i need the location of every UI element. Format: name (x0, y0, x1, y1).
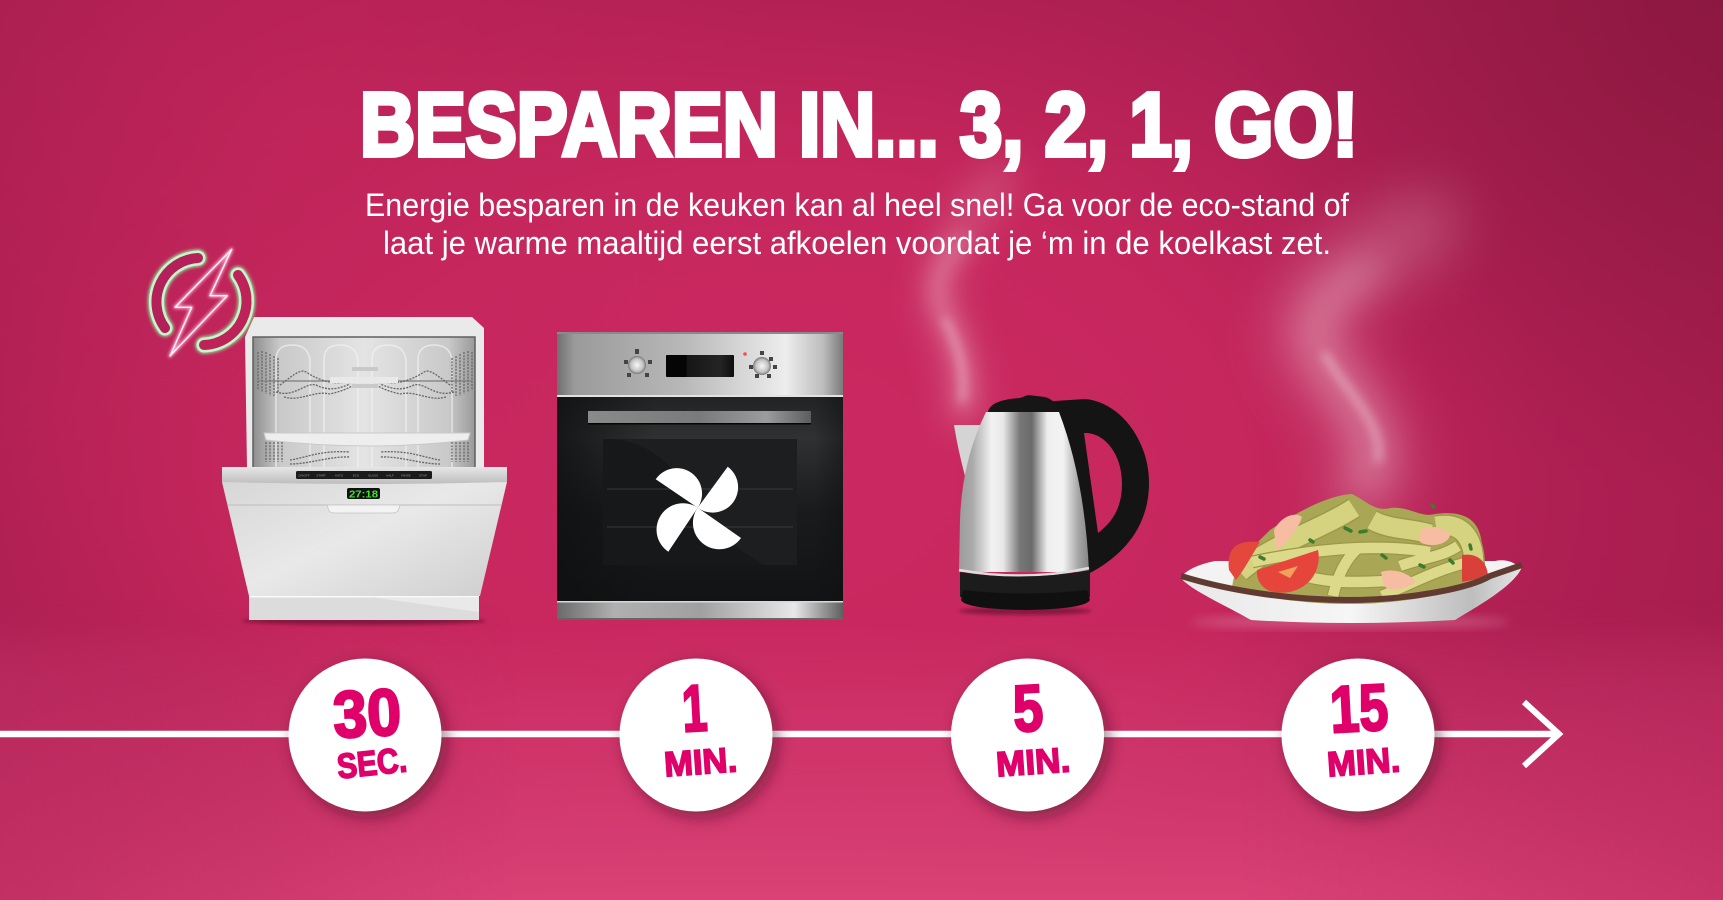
timeline arrow (0, 702, 1560, 766)
step: 1 min: 1 (680, 670, 709, 746)
step: 1 min (620, 658, 772, 812)
noodles (1232, 494, 1482, 606)
spout (954, 425, 990, 476)
step: 5 min: 5 (1011, 670, 1045, 746)
dish racks (258, 351, 472, 398)
dishwasher (222, 317, 507, 625)
step: 5 min: MIN. (995, 740, 1071, 785)
control buttons: GLASS (368, 474, 378, 478)
icon: neon energy bolt (156, 249, 247, 356)
control buttons: AUTO (335, 474, 344, 478)
title: BESPAREN IN... 3, 2, 1, GO! (360, 76, 1358, 176)
oven display (666, 355, 734, 377)
control panel (557, 332, 843, 397)
control buttons (296, 471, 432, 479)
oven (557, 332, 843, 620)
steam above kettle (938, 180, 1000, 415)
step: 1 min: MIN. (663, 740, 738, 784)
step: 15 min (1282, 658, 1434, 812)
step: 15 min: MIN. (1326, 740, 1401, 784)
lid (988, 395, 1062, 414)
plinth (249, 596, 479, 620)
control buttons: RINSE (401, 474, 411, 478)
step: 30 sec: SEC. (335, 740, 409, 787)
cabinet (245, 317, 484, 468)
pasta plate (1180, 494, 1522, 628)
handle (1040, 399, 1149, 574)
intro text (365, 187, 1349, 261)
step: 5 min (951, 658, 1104, 812)
control buttons: START (316, 474, 326, 478)
control buttons: ON/OFF (298, 474, 310, 478)
icon: fan (656, 467, 741, 552)
knob left (624, 349, 652, 377)
door handle (588, 411, 811, 423)
body (959, 412, 1089, 572)
base (960, 570, 1090, 597)
intro text: laat je warme maaltijd eerst afkoelen voordat je ‘m in de koelkast zet. (383, 225, 1331, 261)
step: 30 sec: 30 (331, 674, 403, 752)
digital display: 27:18 (349, 490, 378, 500)
plate front (1180, 567, 1522, 623)
bottom trim (557, 601, 843, 620)
steam above pasta (1310, 225, 1425, 495)
door (222, 467, 507, 596)
control buttons: STOP (419, 474, 427, 478)
kettle (954, 395, 1149, 615)
oven window (603, 439, 797, 565)
shrimps (1274, 515, 1450, 589)
control buttons: HALF (386, 474, 394, 478)
intro text: Energie besparen in de keuken kan al heel snel! Ga voor de eco-stand of (365, 187, 1349, 223)
step: 15 min: 15 (1328, 670, 1390, 746)
step: 30 sec (288, 658, 442, 812)
tomatoes (1229, 542, 1488, 593)
oven door (557, 397, 843, 601)
knob right (749, 351, 777, 378)
plate back (1181, 560, 1520, 590)
digital display (347, 488, 380, 500)
control buttons: ECO (353, 474, 360, 478)
